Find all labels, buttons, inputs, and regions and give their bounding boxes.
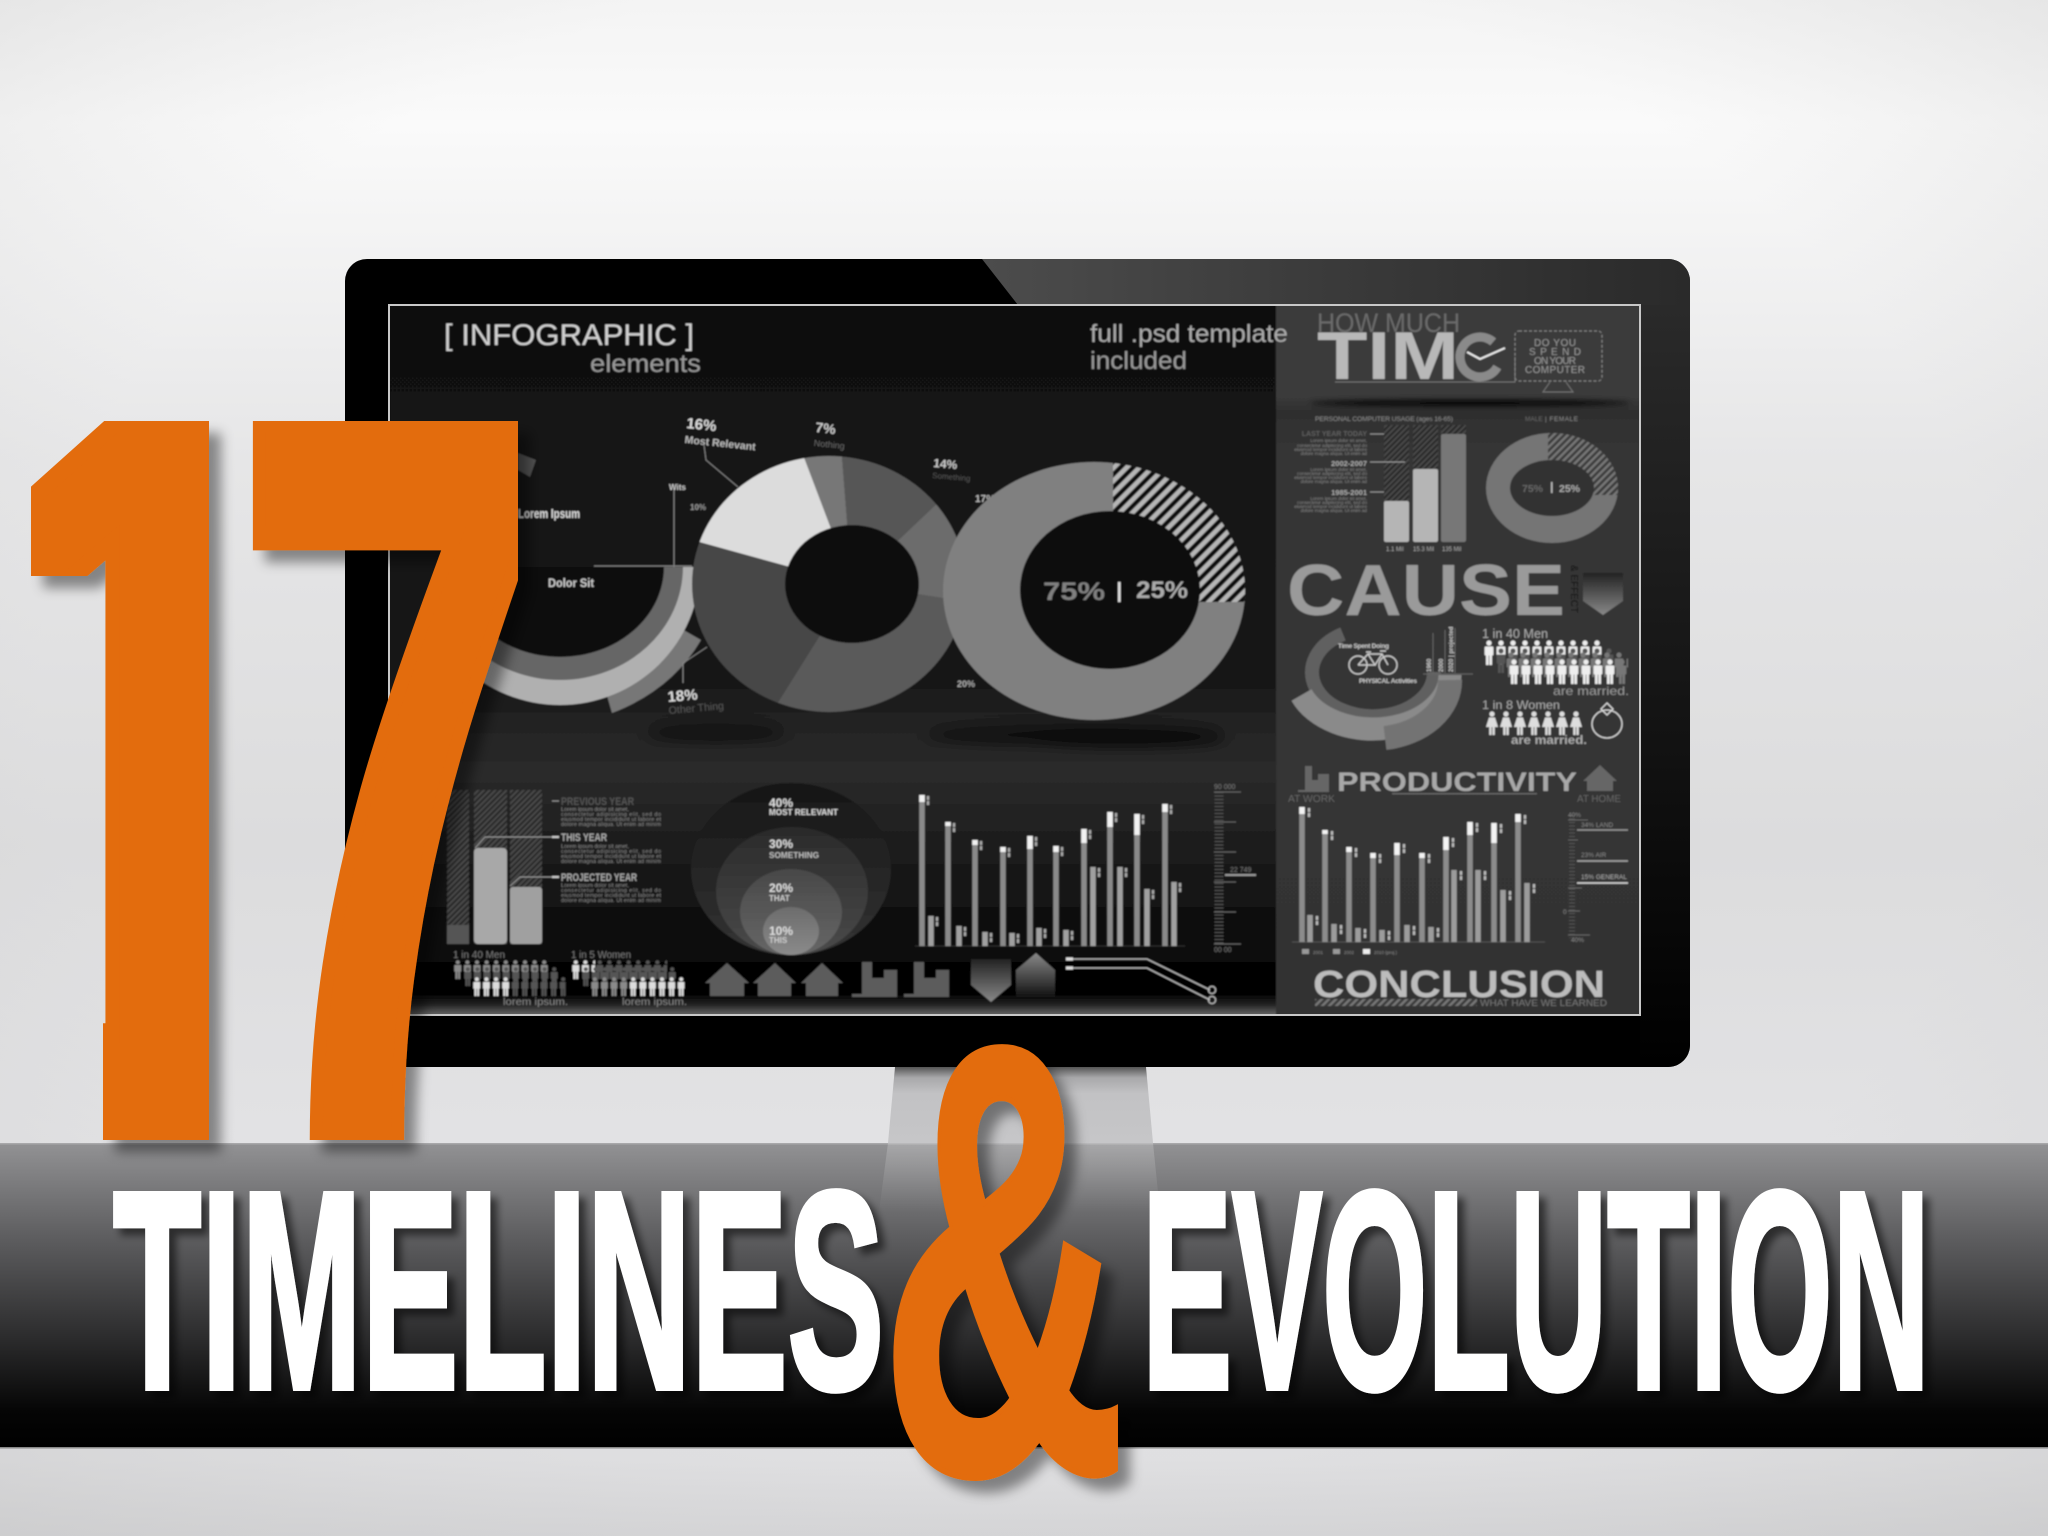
bars: previous, this and projected year: eiusmod tempor incididunt ut labore et xyxy=(561,854,661,860)
half donut labels: Dolor Sit xyxy=(548,576,594,590)
right panel: computer usage bars: Lorem ipsum dolor sit amet, xyxy=(1310,438,1367,443)
donut chart labels xyxy=(667,415,995,717)
right panel: computer usage bars: dolore magna aliqua. Ut enim ad xyxy=(1301,508,1367,513)
nested ellipses chart: SOMETHING xyxy=(769,851,819,860)
half donut labels xyxy=(518,445,738,683)
donut chart labels: Nothing xyxy=(813,438,845,451)
bars: previous, this and projected year: dolore magna aliqua. Ut enim ad minim xyxy=(561,898,661,904)
right panel: time spent ring: Time Spent Doing xyxy=(1338,643,1389,650)
right panel: 1 in 40 men xyxy=(1482,626,1629,698)
shadow under donuts xyxy=(646,726,1225,747)
bars: previous, this and projected year: Lorem ipsum dolor sit amet, xyxy=(561,807,629,813)
monitor bezel xyxy=(345,259,1690,1067)
right panel: how much time header: DO YOU xyxy=(1534,338,1576,349)
right panel: productivity scale: 40% xyxy=(1571,937,1584,944)
nested ellipses chart: MOST RELEVANT xyxy=(769,808,838,817)
right panel: computer usage bars: 135 Mil xyxy=(1442,547,1461,553)
half donut labels: 10% xyxy=(690,503,706,512)
right panel: time spent ring: PHYSICAL Activities xyxy=(1359,678,1417,685)
dark title band xyxy=(0,1143,2048,1448)
donut 75/25: 75% xyxy=(1043,578,1105,606)
icon: ring xyxy=(1592,703,1622,738)
right panel: conclusion: WHAT HAVE WE LEARNED xyxy=(1480,998,1608,1008)
right panel: productivity scale: 34% LAND xyxy=(1581,822,1613,829)
right panel: productivity heading: AT HOME xyxy=(1577,794,1621,805)
right panel: productivity scale: 0 xyxy=(1563,909,1567,916)
bars: previous, this and projected year: eiusmod tempor incididunt ut labore et xyxy=(561,893,661,899)
donut 75/25 xyxy=(943,455,1263,720)
right panel: productivity heading: AT WORK xyxy=(1288,794,1335,805)
half donut labels: Wits xyxy=(669,483,686,492)
note: psd template: included xyxy=(1090,347,1187,375)
icon: down arrow xyxy=(971,959,1011,1002)
right panel: time spent ring: 2000 xyxy=(1439,658,1445,672)
heading: infographic elements xyxy=(444,322,702,374)
right panel: 1 in 8 women xyxy=(1482,698,1622,747)
right panel: how much time header: TIM xyxy=(1317,318,1459,394)
bar chart: screen centre xyxy=(915,795,1185,946)
bars: previous, this and projected year: dolore magna aliqua. Ut enim ad minim xyxy=(561,859,661,865)
right panel: how much time header: ON YOUR xyxy=(1534,356,1576,367)
right panel: productivity scale: 23% AIR xyxy=(1581,852,1607,859)
right panel: 1 in 40 men: are married. xyxy=(1553,684,1629,698)
right panel: small donut: | FEMALE xyxy=(1545,416,1579,423)
right panel: computer usage bars: consectetur adipisicing elit, sed do xyxy=(1297,443,1367,448)
icon: bicycle xyxy=(1349,651,1397,674)
scale: screen centre: 00 00 xyxy=(1214,947,1232,954)
bars: previous, this and projected year: PREVIOUS YEAR xyxy=(561,796,634,808)
nested ellipses chart: 40% xyxy=(769,796,793,810)
right panel: computer usage bars: dolore magna aliqua. Ut enim ad xyxy=(1301,479,1367,484)
bars: previous, this and projected year: PROJECTED YEAR xyxy=(561,872,637,884)
screen xyxy=(389,305,1640,1015)
right panel: computer usage bars: eiusmod tempor incididunt ut labore xyxy=(1294,475,1367,480)
donut chart labels: 18% xyxy=(667,686,698,706)
nested ellipses chart: THIS xyxy=(769,936,788,945)
scale: screen centre xyxy=(1214,784,1256,954)
right panel: small donut: 25% xyxy=(1559,483,1581,495)
donut chart labels: 17% xyxy=(975,494,995,505)
people group: 1 in 40 men: lorem ipsum. xyxy=(503,996,568,1008)
big number 17 xyxy=(31,421,537,1158)
donut chart labels: 7% xyxy=(815,419,837,437)
donut 75/25: 25% xyxy=(1136,577,1188,604)
right panel: productivity bar chart: 2010 (proj.) xyxy=(1374,950,1398,955)
right panel: cause and effect heading: & EFFECT xyxy=(1568,565,1579,613)
right panel: computer usage bars: 2002-2007 xyxy=(1331,459,1367,468)
right panel: computer usage bars: 1.1 Mil xyxy=(1386,547,1404,553)
monitor stand xyxy=(888,1067,1153,1143)
scale: screen centre: 22 749 xyxy=(1230,867,1252,874)
screen border xyxy=(389,305,1640,1015)
bezel glare xyxy=(982,259,1690,1067)
right panel: computer usage bars: LAST YEAR TODAY xyxy=(1302,431,1367,438)
heading: infographic elements: elements xyxy=(590,350,701,378)
right panel: productivity bar chart: 2001 xyxy=(1313,950,1324,955)
heading: infographic elements: [ INFOGRAPHIC ] xyxy=(444,319,694,352)
bars: previous, this and projected year: THIS YEAR xyxy=(561,832,607,844)
right panel: conclusion: CONCLUSION xyxy=(1313,964,1605,1006)
people group: 1 in 5 women: 1 in 5 Women xyxy=(571,950,631,961)
right panel: time spent ring: 2020 | projected xyxy=(1449,626,1455,672)
right panel: small donut: 75% xyxy=(1522,483,1544,495)
bars: previous, this and projected year: eiusmod tempor incididunt ut labore et xyxy=(561,817,661,823)
bars: previous, this and projected year: Lorem ipsum dolor sit amet, xyxy=(561,844,629,850)
scale: screen centre: 90 000 xyxy=(1214,784,1236,791)
right panel: time spent ring: 1960 xyxy=(1427,658,1433,672)
right panel: productivity scale xyxy=(1563,812,1628,944)
nested ellipses chart xyxy=(691,783,891,955)
right column panel xyxy=(1276,305,1640,1015)
donut chart labels: Something xyxy=(932,471,971,483)
half donut chart xyxy=(484,452,702,714)
people group: 1 in 5 women: lorem ipsum. xyxy=(622,996,687,1008)
right panel: computer usage bars: eiusmod tempor incididunt ut labore xyxy=(1294,447,1367,452)
right panel: cause and effect heading xyxy=(1289,563,1624,616)
half donut labels: Lorem Ipsum xyxy=(518,507,580,521)
donut chart labels: 14% xyxy=(933,456,958,472)
right panel: cause and effect heading: CAUSE xyxy=(1287,551,1565,631)
right panel: computer usage bars: Lorem ipsum dolor sit amet, xyxy=(1310,496,1367,501)
note: psd template: full .psd template xyxy=(1090,320,1288,348)
right panel: computer usage bars: consectetur adipisicing elit, sed do xyxy=(1297,500,1367,505)
right panel: 1 in 40 men: 1 in 40 Men xyxy=(1482,626,1548,641)
icon: up arrow xyxy=(1016,953,1055,997)
right panel: computer usage bars: 15.3 Mil xyxy=(1413,547,1434,553)
right panel: productivity bar chart xyxy=(1292,807,1545,955)
right panel: 1 in 8 women: are married. xyxy=(1511,733,1587,747)
right panel: computer usage bars: 1985-2001 xyxy=(1331,488,1367,497)
right panel: productivity scale: 15% GENERAL xyxy=(1581,874,1627,881)
nested ellipses chart: 10% xyxy=(769,924,793,938)
donut chart: segments xyxy=(691,455,957,713)
right panel: time spent ring xyxy=(1302,626,1473,738)
bars: previous, this and projected year: Lorem ipsum dolor sit amet, xyxy=(561,883,629,889)
right panel: computer usage bars: Lorem ipsum dolor sit amet, xyxy=(1310,467,1367,472)
stand reflection xyxy=(879,1143,1160,1212)
donut chart labels: Most Relevant xyxy=(684,434,757,453)
bars: previous, this and projected year: consectetur adipisicing elit, sed do xyxy=(561,888,661,894)
right panel: computer usage bars: PERSONAL COMPUTER USAGE (ages 16-65) xyxy=(1315,416,1453,423)
right panel: how much time header: S P E N D xyxy=(1529,347,1581,358)
right panel: productivity heading xyxy=(1288,765,1621,805)
donut chart labels: 20% xyxy=(957,679,975,689)
people group: 1 in 5 women xyxy=(571,950,687,1008)
people group: 1 in 40 men xyxy=(453,950,568,1008)
title: timelines: TIMELINES xyxy=(113,1133,884,1448)
right panel: small donut: MALE xyxy=(1525,416,1543,423)
bars: previous, this and projected year: dolore magna aliqua. Ut enim ad minim xyxy=(561,822,661,828)
right panel: productivity scale: 40% xyxy=(1568,812,1581,819)
bars: previous, this and projected year: consectetur adipisicing elit, sed do xyxy=(561,849,661,855)
right panel: how much time header xyxy=(1310,308,1630,406)
donut chart labels: 16% xyxy=(686,415,717,435)
bars: previous, this and projected year: consectetur adipisicing elit, sed do xyxy=(561,812,661,818)
donut chart labels: Other Thing xyxy=(668,700,725,717)
nested ellipses chart: 20% xyxy=(769,881,793,895)
right panel: computer usage bars: consectetur adipisicing elit, sed do xyxy=(1297,471,1367,476)
right panel: how much time header: HOW MUCH xyxy=(1317,308,1460,338)
nested ellipses chart: THAT xyxy=(769,894,790,903)
right panel: computer usage bars xyxy=(1294,416,1466,553)
note: psd template xyxy=(1089,322,1288,370)
connector lines xyxy=(1066,959,1216,1004)
right panel: small donut xyxy=(1486,416,1620,543)
right panel: computer usage bars: dolore magna aliqua. Ut enim ad xyxy=(1301,451,1367,456)
icons: buildings xyxy=(852,962,949,997)
bars: previous, this and projected year xyxy=(447,790,661,944)
right panel: 1 in 8 women: 1 in 8 Women xyxy=(1482,698,1560,712)
right panel: productivity heading: PRODUCTIVITY xyxy=(1337,767,1577,797)
people group: 1 in 40 men: 1 in 40 Men xyxy=(453,950,505,961)
big number 17: 7 xyxy=(235,193,551,1362)
monitor xyxy=(345,259,1690,1067)
nested ellipses chart: 30% xyxy=(769,837,793,851)
right panel: productivity bar chart: 2002 xyxy=(1344,950,1355,955)
right panel: computer usage bars: eiusmod tempor incididunt ut labore xyxy=(1294,504,1367,509)
icons: houses xyxy=(705,963,843,996)
right panel: how much time header: COMPUTER xyxy=(1525,365,1585,376)
